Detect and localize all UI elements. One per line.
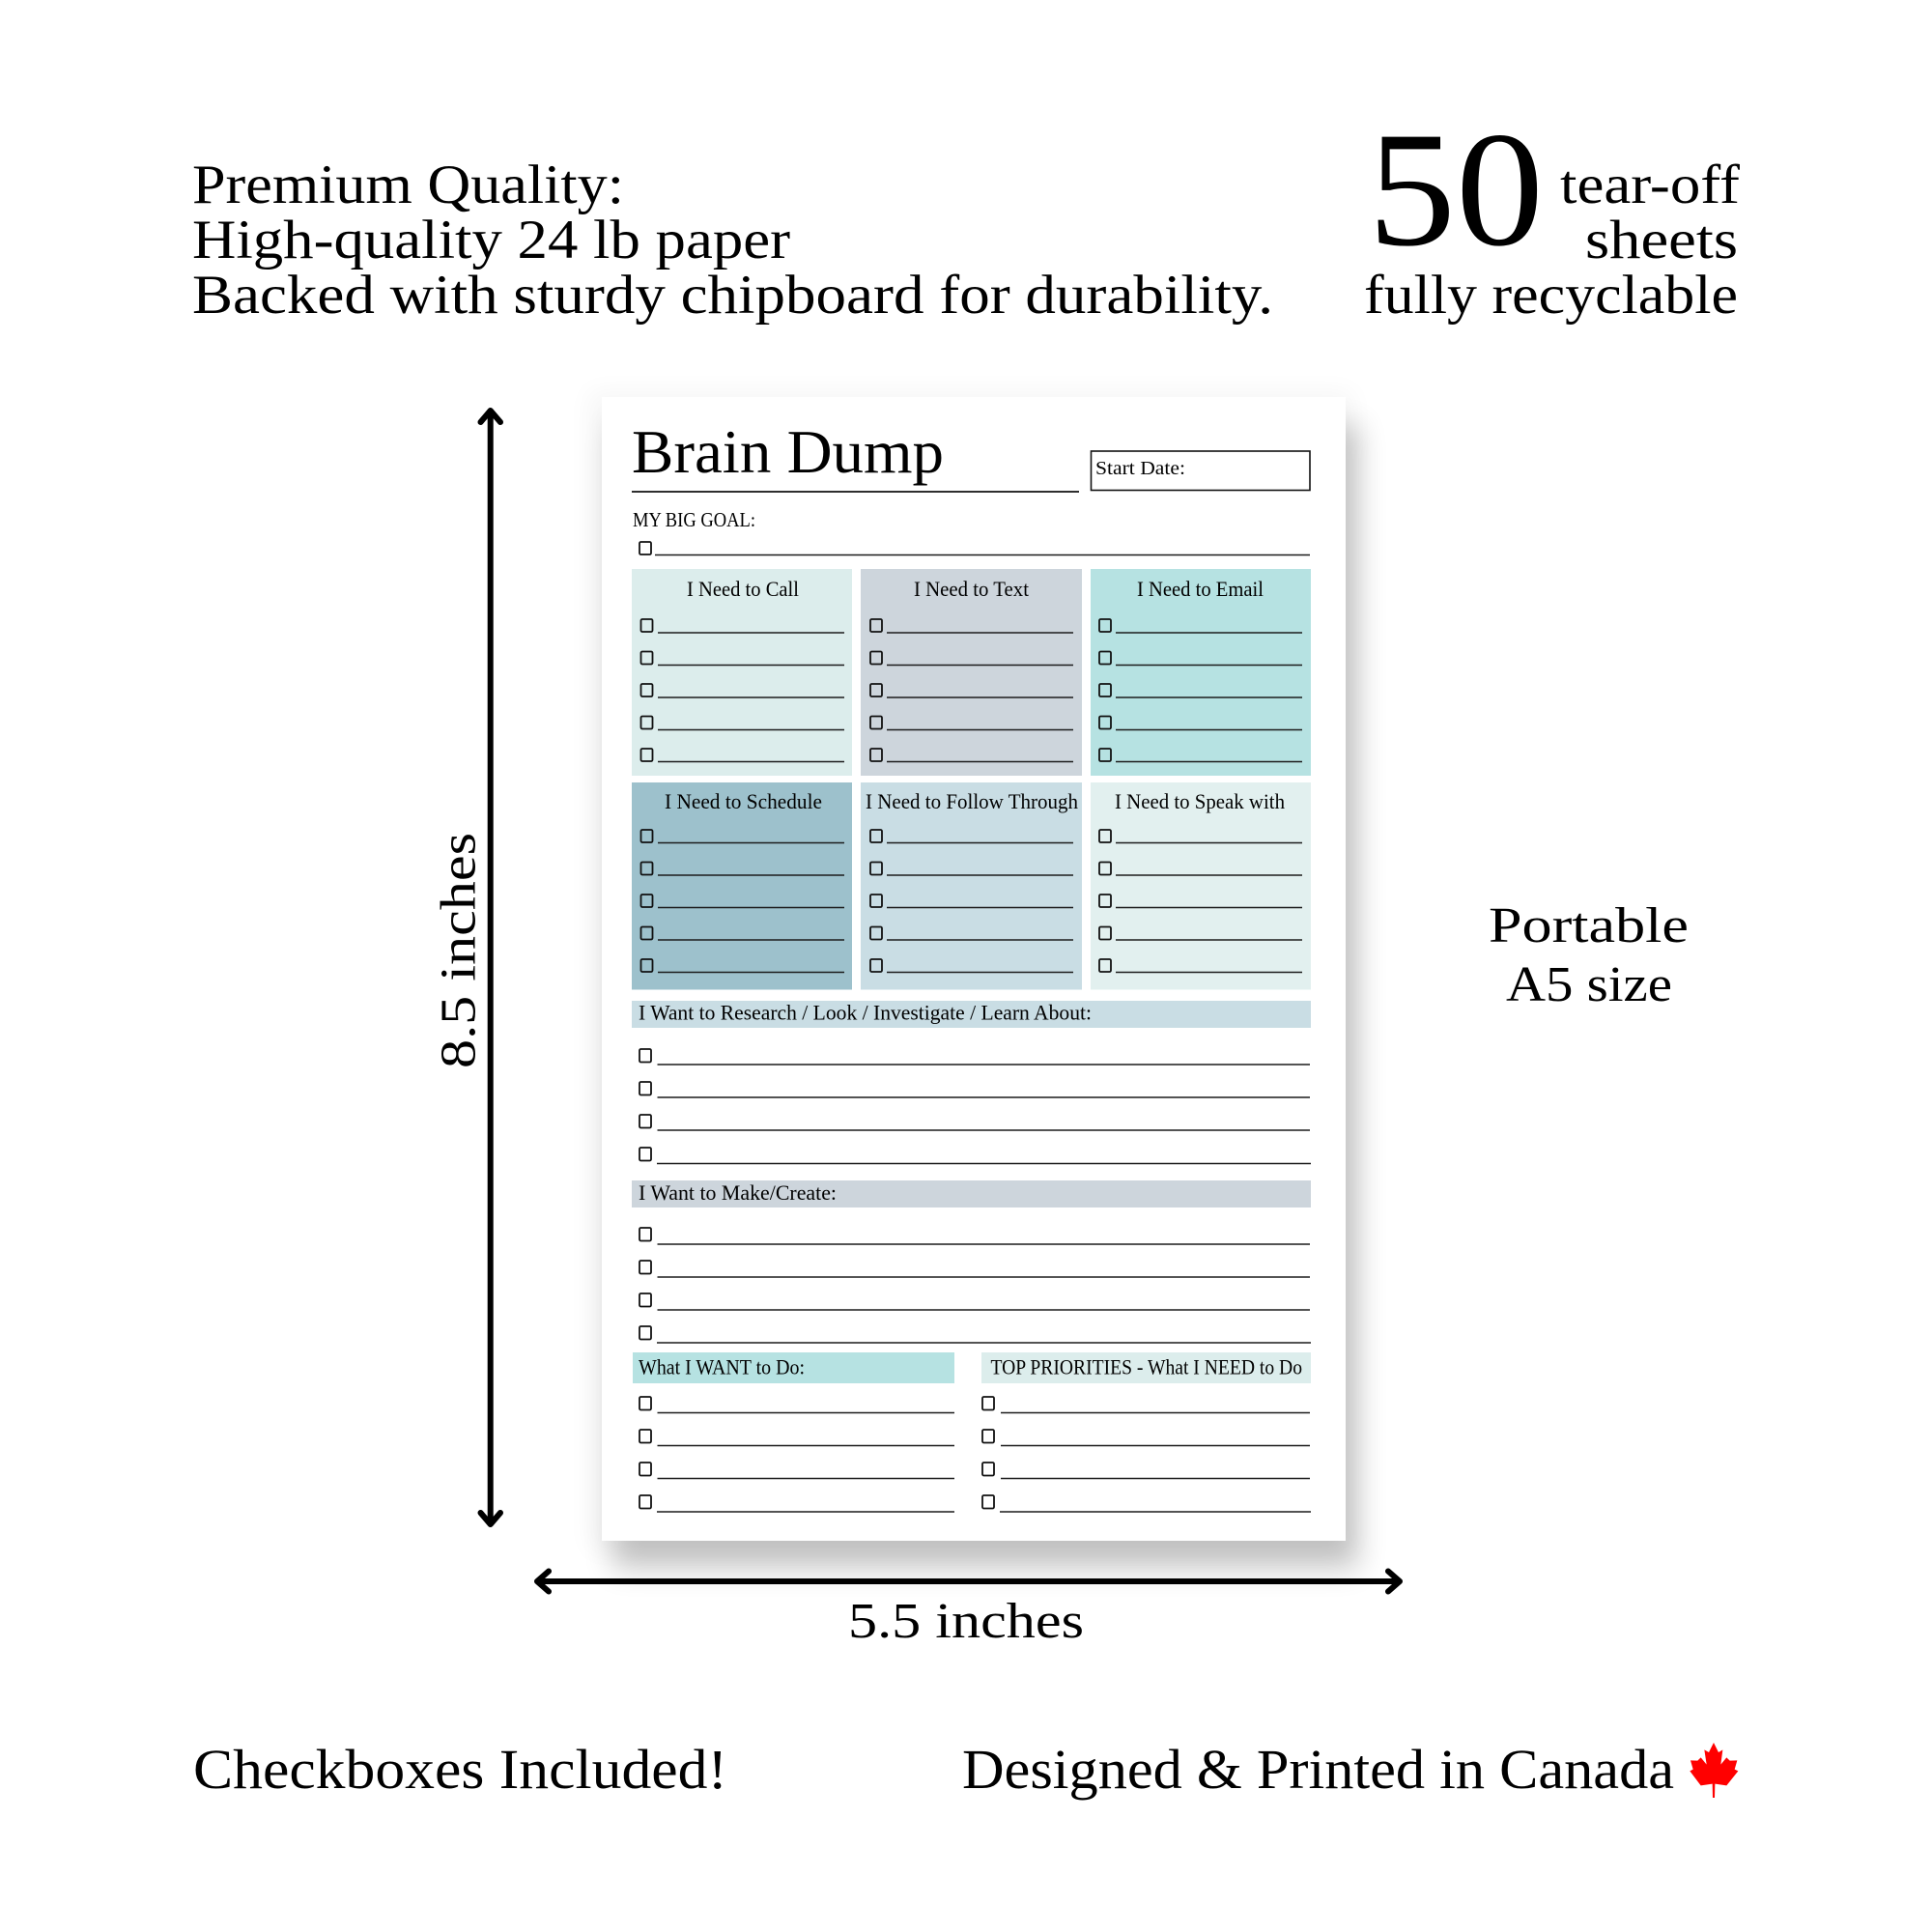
icon: maple leaf (1690, 1743, 1738, 1798)
label: Portable A5 size (1489, 898, 1689, 1012)
panel: I Need to Call (632, 569, 852, 776)
arrow: width dimension (537, 1571, 1400, 1592)
callout: 50 tear-off sheets, fully recyclable: fully recyclable (1364, 265, 1738, 326)
text: Designed and Printed in Canada: Designed & Printed in Canada (962, 1738, 1674, 1801)
section: TOP PRIORITIES: TOP PRIORITIES - What I NEED to Do (991, 1354, 1302, 1379)
panel: I Need to Schedule (632, 782, 852, 989)
callout: 50 tear-off sheets, fully recyclable: sheets (1585, 210, 1738, 270)
callout: 50 tear-off sheets, fully recyclable: tear-off (1560, 155, 1740, 215)
panel: I Need to Follow Through: I Need to Follow Through (866, 789, 1078, 813)
panel: I Need to Speak with (1091, 782, 1311, 989)
panel: I Need to Text: I Need to Text (914, 577, 1029, 601)
my big goal (633, 508, 1310, 554)
label: Portable A5 size: A5 size (1506, 957, 1672, 1012)
section: I Want to Make/Create (632, 1180, 1311, 1343)
section: TOP PRIORITIES (981, 1352, 1311, 1512)
label: Portable A5 size: Portable (1489, 898, 1689, 953)
start date box (1092, 451, 1310, 491)
callout: 50 tear-off sheets, fully recyclable: 50 (1368, 99, 1544, 280)
text: Checkboxes Included: Checkboxes Included! (193, 1738, 727, 1801)
section: I Want to Make/Create: I Want to Make/Create: (639, 1180, 837, 1205)
section: What I WANT to Do: What I WANT to Do: (639, 1354, 805, 1379)
section: I Want to Research (632, 1001, 1311, 1163)
my big goal: MY BIG GOAL: (633, 508, 755, 531)
panel: I Need to Follow Through (861, 782, 1082, 989)
panel: I Need to Speak with: I Need to Speak with (1115, 789, 1285, 813)
panel: I Need to Call: I Need to Call (687, 577, 799, 601)
panel: I Need to Email: I Need to Email (1137, 577, 1264, 601)
label: 8.5 inches: 8.5 inches (431, 833, 487, 1068)
notepad title: Brain Dump (632, 417, 944, 486)
start date box: Start Date: (1095, 458, 1185, 479)
section: I Want to Research: I Want to Research / Look / Investigate / Learn About: (639, 1001, 1092, 1024)
notepad sheet shadow (589, 391, 1358, 1569)
section: What I WANT to Do (633, 1352, 954, 1512)
callout: 50 tear-off sheets, fully recyclable (1364, 99, 1740, 326)
heading: premium quality: High-quality 24 lb paper (192, 210, 790, 270)
arrow: height dimension (481, 411, 500, 1524)
notepad sheet (602, 397, 1346, 1541)
heading: premium quality: Premium Quality: (192, 155, 624, 215)
panel: I Need to Email (1091, 569, 1311, 776)
heading: premium quality: Backed with sturdy chipboard for durability. (192, 265, 1273, 326)
panel: I Need to Schedule: I Need to Schedule (665, 789, 822, 813)
label: 5.5 inches: 5.5 inches (848, 1594, 1084, 1649)
heading: premium quality (192, 155, 1273, 326)
panel: I Need to Text (861, 569, 1082, 776)
